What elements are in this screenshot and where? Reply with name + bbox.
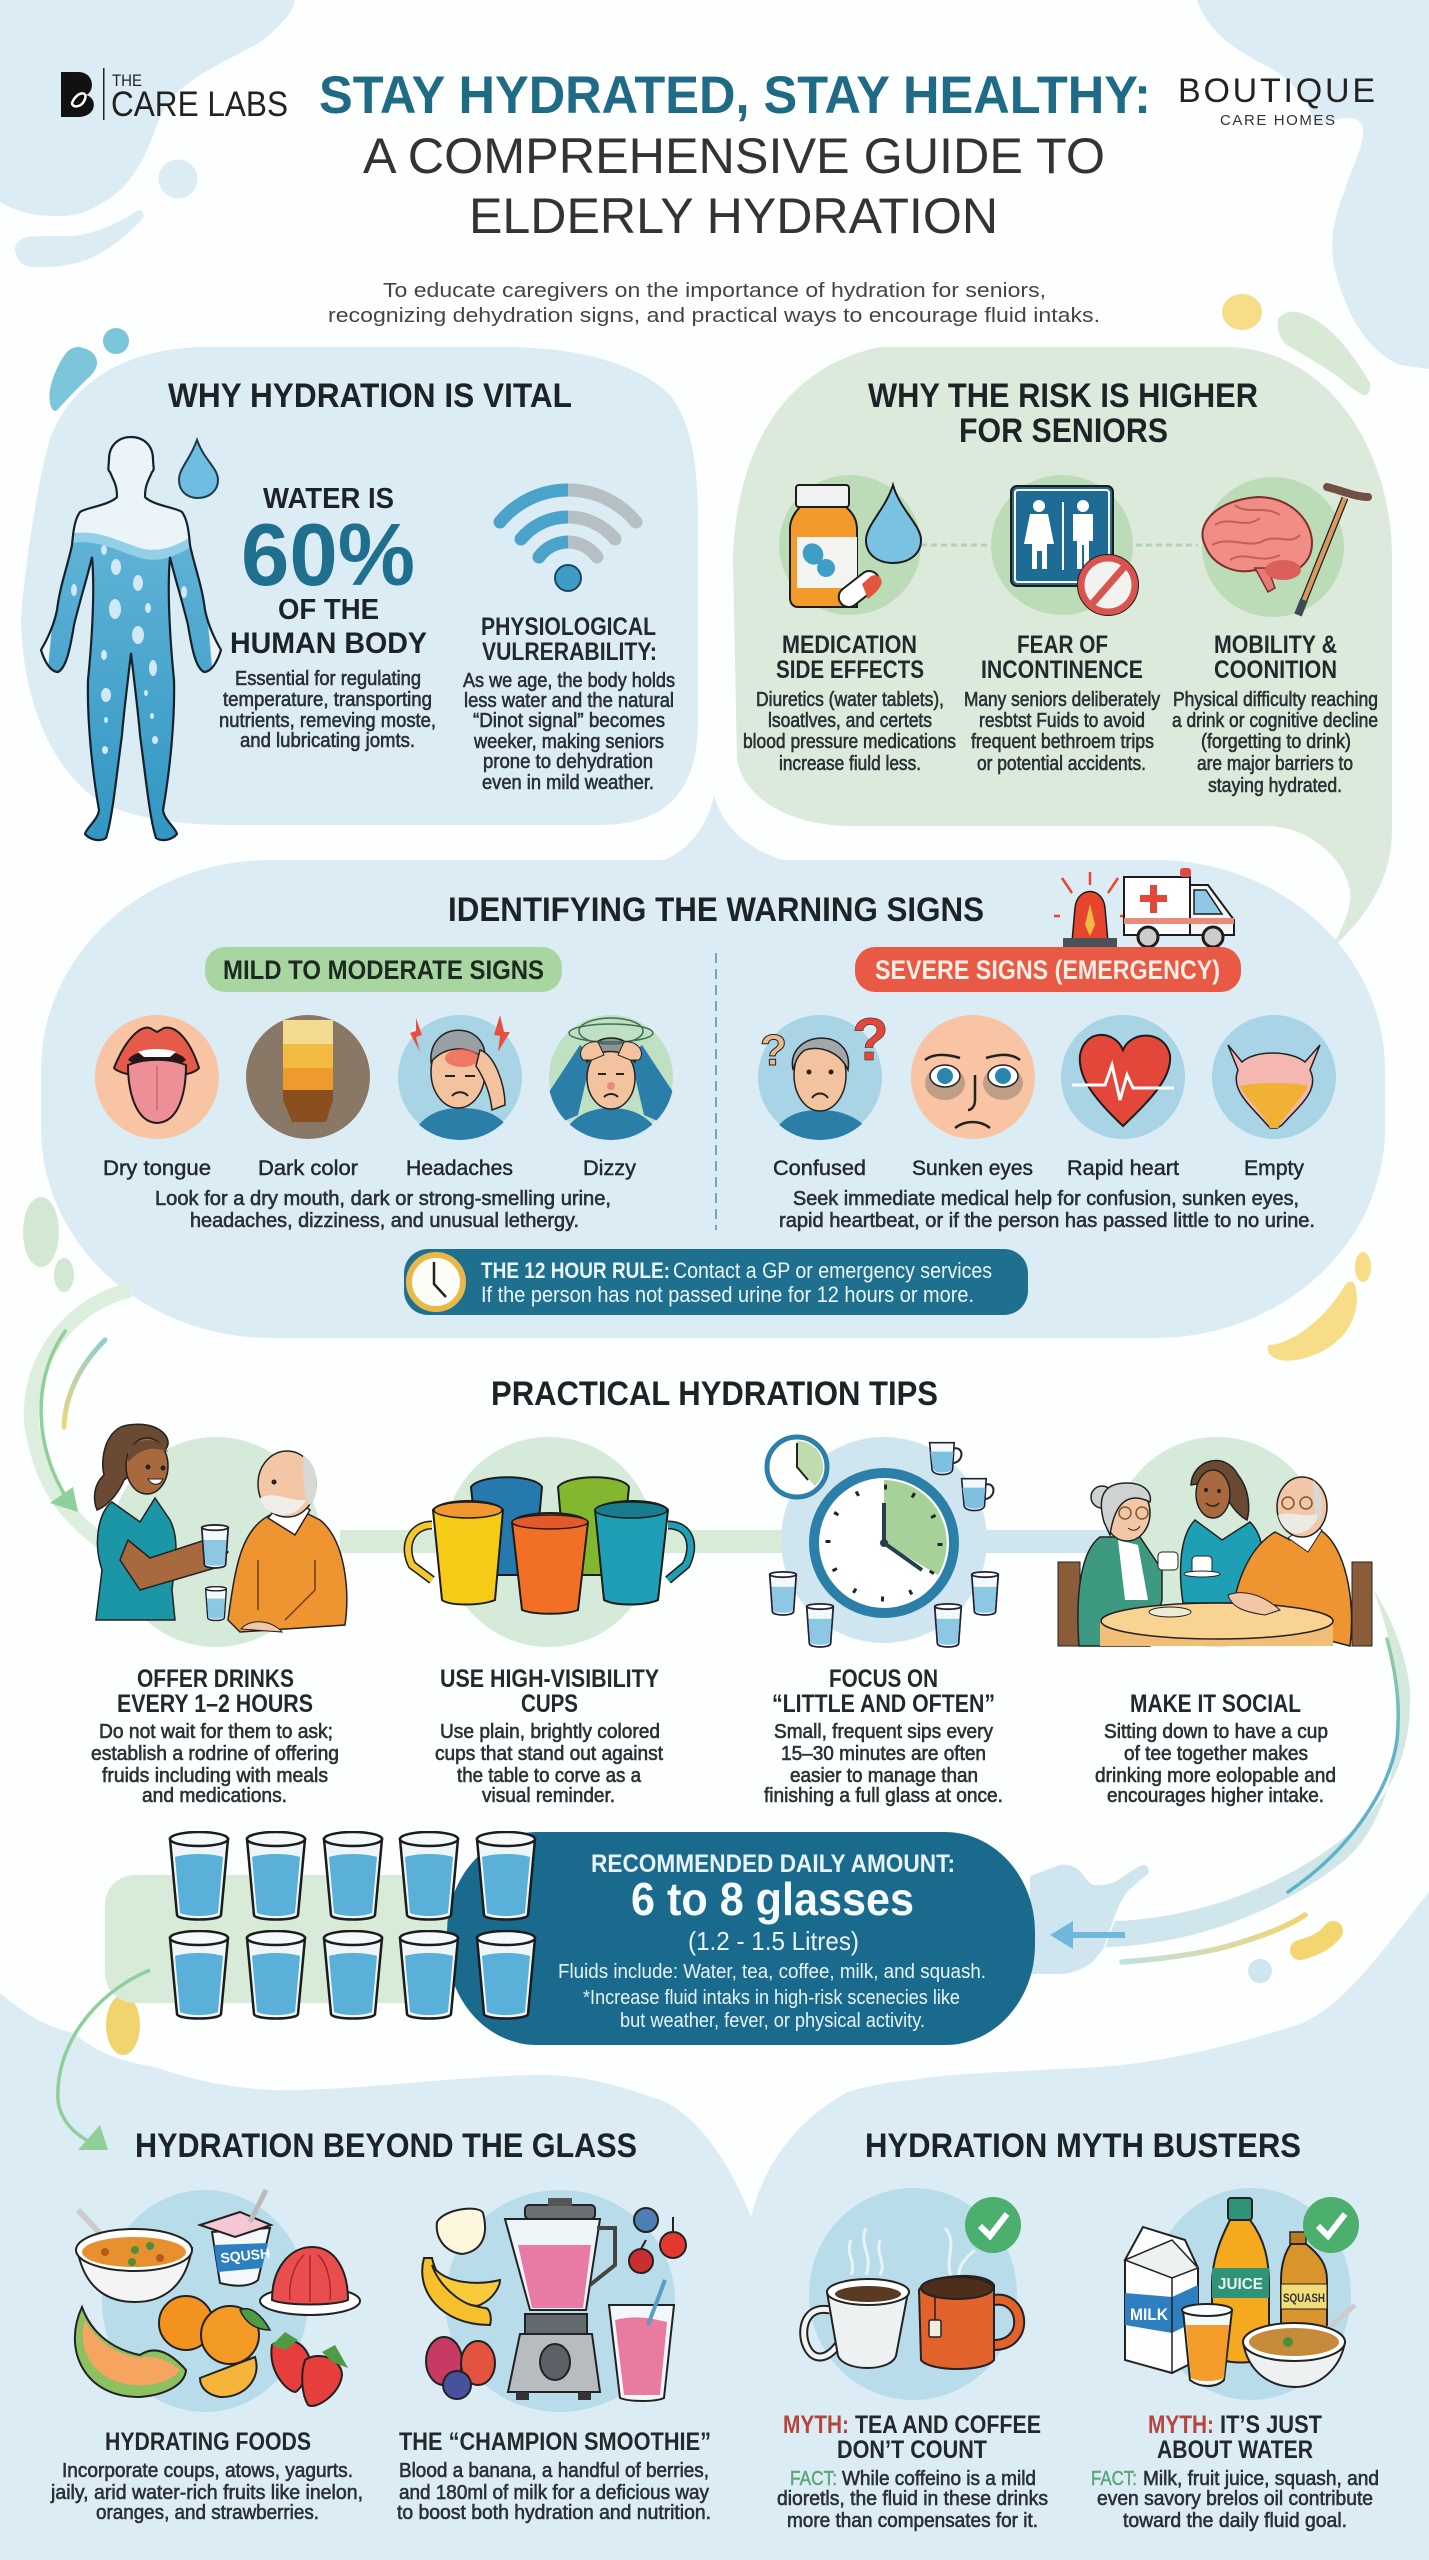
text: *Increase fluid intaks in high-risk scenecies like: [583, 1987, 960, 2009]
orange mug: [919, 2276, 1019, 2369]
text: fear of incontinence: or potential accidents.: [977, 753, 1146, 775]
icon: confused person: ?: [760, 1026, 787, 1075]
decoration: yellow drops: [1268, 1252, 1371, 1361]
decoration: green ovals: [23, 1197, 74, 1292]
tip text: make it social: encourages higher intake.: [1107, 1785, 1324, 1807]
text: hydrating foods: Incorporate coups, atows, yagurts.: [62, 2460, 353, 2482]
melon: [75, 2307, 186, 2397]
text: mobility and cognition: (forgetting to drink): [1201, 731, 1351, 753]
text: just about water myth: Milk, fruit juice, squash, and: [1143, 2468, 1379, 2490]
logo: The Care Labs: CARE LABS: [111, 85, 288, 124]
title: ELDERLY HYDRATION: [469, 188, 998, 244]
icon: brain and cane: [1202, 477, 1368, 617]
icon: clock: [409, 1255, 463, 1309]
icon: rapid heart: [1061, 1015, 1185, 1139]
heading: hydration beyond the glass: HYDRATION BEYOND THE GLASS: [135, 2127, 637, 2165]
callout: 12 hour rule: [404, 1249, 1028, 1315]
text: fear of incontinence: resbtst Fuids to avoid: [979, 710, 1145, 732]
background blob: top right: [1197, 0, 1429, 369]
icon: urine colour tube: [246, 1015, 370, 1139]
text: fear of incontinence: INCONTINENCE: [981, 656, 1143, 684]
labels: severe signs: Rapid heart: [1067, 1157, 1179, 1180]
labels: mild signs: [103, 1157, 637, 1180]
illustration: other fluids: [1125, 2188, 1359, 2400]
heading: [868, 377, 1258, 450]
background: yellow oval: [1222, 294, 1262, 330]
text: essential: [219, 668, 436, 752]
text: just about water myth: [1091, 2411, 1379, 2532]
illustration: champion smoothie: [422, 2190, 686, 2412]
text: mobility and cognition: Physical difficulty reaching: [1173, 689, 1378, 711]
logo: Boutique Care Homes: CARE HOMES: [1220, 112, 1335, 129]
berries: [426, 2337, 495, 2399]
text: fear of incontinence: frequent bethroem trips: [971, 731, 1154, 753]
milk carton: MILK: [1130, 2305, 1169, 2324]
text: tea and coffee myth: DON’T COUNT: [837, 2436, 987, 2464]
subtitle: recognizing dehydration signs, and practical ways to encourage fluid intaks.: [328, 305, 1100, 327]
squash bottle: SQUASH: [1283, 2291, 1325, 2305]
text: [558, 1850, 986, 2032]
icon: confused person: ?: [852, 1006, 889, 1073]
stat: water is 60%: HUMAN BODY: [230, 627, 427, 660]
illustration: tea and coffee: [804, 2188, 1021, 2400]
text: RECOMMENDED DAILY AMOUNT:: [591, 1850, 955, 1878]
juice bottle: JUICE: [1218, 2276, 1263, 2293]
text: mobility and cognition: MOBILITY &: [1214, 631, 1337, 659]
callout: 12 hour rule: THE 12 HOUR RULE:: [481, 1258, 670, 1283]
heading: myth busters: HYDRATION MYTH BUSTERS: [865, 2127, 1301, 2165]
text: essential: temperature, transporting: [223, 689, 432, 711]
title: A COMPREHENSIVE GUIDE TO: [363, 128, 1105, 184]
strawberries: [271, 2332, 348, 2406]
text: as we age: “Dinot signal” becomes: [473, 710, 665, 732]
text: as we age: less water and the natural: [464, 690, 674, 712]
subtitle: [328, 280, 1100, 327]
icon group: ten glasses: [170, 1832, 535, 2018]
text: fear of incontinence: [964, 631, 1160, 775]
stat: water is 60%: [230, 483, 427, 660]
white cup: [804, 2279, 909, 2368]
icon: ambulance: [1124, 868, 1234, 947]
heading: practical hydration tips: PRACTICAL HYDRATION TIPS: [491, 1375, 938, 1413]
subtitle: To educate caregivers on the importance of hydration for seniors,: [383, 280, 1046, 302]
logo: The Care Labs: [61, 68, 288, 124]
tip text: little and often: “LITTLE AND OFTEN”: [772, 1690, 995, 1718]
text: as we age: As we age, the body holds: [463, 670, 675, 692]
title: STAY HYDRATED, STAY HEALTHY:: [319, 66, 1151, 125]
text: Fluids include: Water, tea, coffee, milk, and squash.: [558, 1961, 986, 1983]
icon: dizzy person: [549, 1015, 673, 1140]
text: as we age: even in mild weather.: [482, 772, 654, 794]
labels: severe signs: Sunken eyes: [912, 1157, 1033, 1180]
labels: severe signs: Confused: [773, 1157, 866, 1180]
tip text: high-visibility cups: the table to corve as a: [457, 1765, 642, 1787]
heading: physiological vulnerability: VULRERABILITY:: [482, 638, 657, 666]
text: medication side effects: [743, 631, 956, 775]
stat: water is 60%: 60%: [241, 505, 415, 604]
text: mobility and cognition: COONITION: [1214, 656, 1337, 684]
pill: severe signs: SEVERE SIGNS (EMERGENCY): [875, 955, 1220, 985]
tip text: high-visibility cups: [435, 1665, 663, 1807]
icon: dry tongue: [95, 1015, 219, 1139]
tip text: high-visibility cups: Use plain, brightly colored: [440, 1721, 660, 1743]
text: tea and coffee myth: FACT:: [790, 2468, 837, 2490]
background blob: bottom wave: [0, 1892, 1429, 2560]
stat: water is 60%: OF THE: [278, 594, 379, 626]
labels: mild signs: Dry tongue: [103, 1157, 211, 1180]
text: mild description: [155, 1188, 611, 1232]
yogurt: [200, 2190, 271, 2286]
callout: 12 hour rule: Contact a GP or emergency services: [673, 1258, 992, 1283]
text: champion smoothie: Blood a banana, a handful of berries,: [399, 2460, 709, 2482]
background: blue wedge between panels: [660, 795, 790, 862]
icon: sunken eyes: [911, 1015, 1035, 1139]
text: champion smoothie: THE “CHAMPION SMOOTHIE”: [399, 2428, 711, 2456]
callout: 12 hour rule: If the person has not passed urine for 12 hours or more.: [481, 1282, 974, 1307]
tip text: make it social: of tee together makes: [1124, 1743, 1308, 1765]
green block behind glasses: [105, 1875, 450, 2003]
text: essential: and lubricating jomts.: [240, 730, 415, 752]
labels: mild signs: Dizzy: [583, 1157, 637, 1180]
labels: severe signs: Empty: [1244, 1157, 1305, 1180]
text: medication side effects: SIDE EFFECTS: [776, 656, 924, 684]
text: medication side effects: blood pressure medications: [743, 731, 956, 753]
text: as we age: prone to dehydration: [483, 751, 653, 773]
big clock: [814, 1473, 954, 1613]
text: tea and coffee myth: more than compensates for it.: [787, 2510, 1038, 2532]
text: hydrating foods: HYDRATING FOODS: [105, 2428, 311, 2456]
yogurt: SQUSH: [220, 2245, 271, 2266]
text: tea and coffee myth: dioretls, the fluid in these drinks: [777, 2488, 1048, 2510]
heading: physiological vulnerability: [481, 613, 657, 666]
blueberry and cherries: [629, 2208, 686, 2273]
tip text: high-visibility cups: visual reminder.: [482, 1785, 615, 1807]
tip text: offer drinks: and medications.: [142, 1785, 287, 1807]
icon: bladder: [1212, 1015, 1336, 1139]
tip text: little and often: easier to manage than: [790, 1765, 978, 1787]
oranges: [159, 2296, 270, 2397]
spoon and soup bowl: [76, 2210, 192, 2302]
text: champion smoothie: [397, 2428, 711, 2524]
icon: headache person: [398, 1015, 522, 1140]
text: just about water myth: FACT:: [1091, 2468, 1137, 2490]
icon: confused person: [758, 1006, 889, 1140]
heading: FOR SENIORS: [959, 412, 1168, 450]
text: as we age: [463, 670, 675, 794]
logo: Boutique Care Homes: BOUTIQUE: [1178, 72, 1375, 110]
text: severe description: [779, 1188, 1315, 1232]
heading: WHY THE RISK IS HIGHER: [868, 377, 1258, 415]
background blob: top left: [0, 0, 295, 216]
tip text: make it social: drinking more eolopable and: [1095, 1765, 1336, 1787]
heading: IDENTIFYING THE WARNING SIGNS: [448, 891, 984, 929]
text: champion smoothie: to boost both hydration and nutrition.: [397, 2502, 711, 2524]
text: (1.2 - 1.5 Litres): [688, 1926, 859, 1956]
illustration: nurse offering drink: [95, 1424, 347, 1647]
squash bottle: [1281, 2232, 1327, 2327]
text: hydrating foods: oranges, and strawberries.: [96, 2502, 319, 2524]
tip text: offer drinks: OFFER DRINKS: [137, 1665, 294, 1693]
text: just about water myth: toward the daily fluid goal.: [1123, 2510, 1347, 2532]
text: hydrating foods: jaily, arid water-rich fruits like inelon,: [50, 2482, 363, 2504]
icon: restroom sign with prohibition: [991, 475, 1138, 616]
badge: check: [965, 2197, 1021, 2253]
text: mobility and cognition: are major barriers to: [1197, 753, 1353, 775]
labels: mild signs: Dark color: [258, 1157, 358, 1180]
jelly: [260, 2247, 360, 2315]
tip text: little and often: finishing a full glass at once.: [764, 1785, 1003, 1807]
text: fear of incontinence: FEAR OF: [1017, 631, 1108, 659]
text: medication side effects: increase fiuld less.: [779, 753, 921, 775]
background blob: top left circle: [158, 160, 198, 198]
flow arrow: down to beyond the glass: [58, 1970, 150, 2150]
text: severe description: Seek immediate medical help for confusion, sunken eyes,: [793, 1188, 1299, 1210]
illustration: clock and small sips: [767, 1437, 998, 1647]
panel: warning signs: [41, 860, 1385, 1338]
text: just about water myth: MYTH:: [1148, 2411, 1214, 2439]
tip text: offer drinks: fruids including with meals: [102, 1765, 328, 1787]
flow arrow: into tips section: [31, 1290, 130, 1548]
drop: top-left decoration: [49, 347, 97, 411]
tip text: high-visibility cups: USE HIGH-VISIBILITY: [440, 1665, 659, 1693]
steam: [849, 2228, 975, 2288]
stat: water is 60%: WATER IS: [263, 483, 394, 515]
background: green leaf: [1278, 312, 1370, 395]
text: just about water myth: IT’S JUST: [1220, 2411, 1322, 2439]
text: but weather, fever, or physical activity.: [620, 2010, 925, 2032]
text: 6 to 8 glasses: [631, 1873, 914, 1925]
text: tea and coffee myth: [777, 2411, 1048, 2532]
icon: human body filled with water: [40, 436, 222, 842]
connector band behind tips: [340, 1530, 1115, 1553]
text: mild description: Look for a dry mouth, dark or strong-smelling urine,: [155, 1188, 611, 1210]
juice glass: [1182, 2304, 1232, 2386]
text: tea and coffee myth: While coffeino is a mild: [842, 2468, 1036, 2490]
heading: WHY HYDRATION IS VITAL: [168, 377, 572, 415]
pill: severe signs: [855, 947, 1241, 992]
panel: why the risk is higher: [733, 347, 1392, 950]
text: fear of incontinence: Many seniors deliberately: [964, 689, 1160, 711]
smoothie glass: [609, 2280, 674, 2401]
labels: severe signs: [773, 1157, 1305, 1180]
badge: check: [1303, 2197, 1359, 2253]
tip text: offer drinks: Do not wait for them to ask;: [99, 1721, 333, 1743]
labels: mild signs: Headaches: [406, 1157, 513, 1180]
soup bowl: [1243, 2305, 1355, 2387]
cream: [437, 2209, 485, 2254]
callout: recommended daily amount: [447, 1832, 1035, 2045]
text: essential: Essential for regulating: [235, 668, 421, 690]
text: essential: nutrients, remeving moste,: [219, 710, 436, 732]
tip text: offer drinks: establish a rodrine of offering: [91, 1743, 339, 1765]
logo: The Care Labs: THE: [112, 71, 142, 90]
text: hydrating foods: [50, 2428, 363, 2524]
tip text: offer drinks: [91, 1665, 339, 1807]
icon: medication bottle and drop: [779, 475, 921, 615]
tip text: high-visibility cups: cups that stand out against: [435, 1743, 663, 1765]
text: just about water myth: even savory brelos oil contribute: [1097, 2488, 1373, 2510]
panel: why hydration is vital: [21, 347, 698, 860]
logo: Boutique Care Homes: [1178, 72, 1375, 129]
text: medication side effects: Diuretics (water tablets),: [756, 689, 944, 711]
illustration: sharing tea at table: [1058, 1437, 1372, 1647]
heading: physiological vulnerability: PHYSIOLOGICAL: [481, 613, 656, 641]
pill: mild to moderate signs: [205, 947, 562, 992]
tip text: little and often: Small, frequent sips every: [774, 1721, 993, 1743]
illustration: high-visibility cups: [408, 1437, 691, 1647]
icon: water drop: [179, 440, 218, 498]
text: mobility and cognition: [1172, 631, 1378, 797]
decoration: yellow and blue drops: [106, 1931, 1333, 2055]
flow band: right side sweep: [1105, 1589, 1410, 1947]
text: mobility and cognition: a drink or cognitive decline: [1172, 710, 1378, 732]
text: mobility and cognition: staying hydrated.: [1208, 775, 1342, 797]
background blob: top left streak: [15, 210, 144, 267]
banana: [422, 2258, 491, 2325]
tip text: high-visibility cups: CUPS: [521, 1690, 578, 1718]
flow arrow: right side to daily amount: [1030, 1639, 1398, 1974]
tip text: little and often: 15–30 minutes are often: [781, 1743, 986, 1765]
tip text: offer drinks: EVERY 1–2 HOURS: [117, 1690, 313, 1718]
illustration: hydrating foods: [75, 2190, 360, 2412]
tip text: little and often: FOCUS ON: [829, 1665, 938, 1693]
text: medication side effects: lsoatlves, and certets: [768, 710, 932, 732]
text: just about water myth: ABOUT WATER: [1157, 2436, 1313, 2464]
pill: mild to moderate signs: MILD TO MODERATE SIGNS: [223, 955, 544, 985]
connectors: [921, 544, 1198, 546]
icon: siren: [1054, 872, 1126, 947]
tip text: make it social: MAKE IT SOCIAL: [1130, 1690, 1301, 1718]
tip text: make it social: Sitting down to have a cup: [1104, 1721, 1328, 1743]
text: medication side effects: MEDICATION: [782, 631, 917, 659]
text: as we age: weeker, making seniors: [473, 731, 664, 753]
text: mild description: headaches, dizziness, and unusual lethergy.: [190, 1210, 579, 1232]
text: champion smoothie: and 180ml of milk for a deficious way: [399, 2482, 709, 2504]
text: tea and coffee myth: TEA AND COFFEE: [855, 2411, 1041, 2439]
title: [319, 66, 1151, 244]
dot: top-left decoration: [103, 328, 129, 354]
milk carton: [1125, 2227, 1198, 2373]
icon: weak signal: [494, 490, 636, 591]
juice bottle: [1212, 2198, 1269, 2362]
tip text: little and often: [764, 1665, 1003, 1807]
blender: [505, 2198, 615, 2400]
text: severe description: rapid heartbeat, or if the person has passed little to no urine.: [779, 1210, 1315, 1232]
tip text: make it social: [1095, 1690, 1336, 1807]
small clock: [767, 1437, 827, 1497]
text: tea and coffee myth: MYTH:: [783, 2411, 849, 2439]
